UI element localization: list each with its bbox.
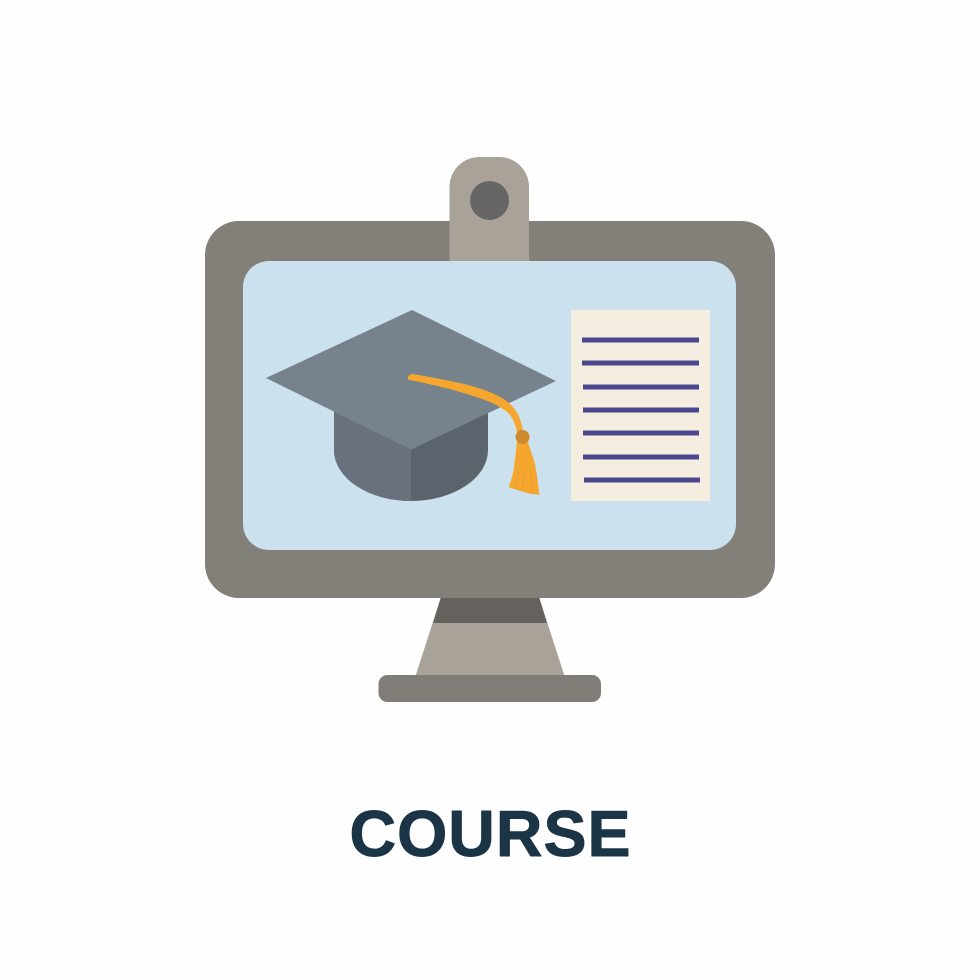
- tassel: [408, 374, 540, 495]
- webcam: [450, 157, 529, 262]
- icon: computer monitor: [205, 157, 775, 702]
- icon: graduation cap: [266, 310, 556, 501]
- title: COURSE: [350, 798, 630, 870]
- screen: [243, 261, 736, 550]
- document with lines: [571, 310, 710, 501]
- monitor stand: [378, 597, 601, 702]
- monitor frame: [205, 221, 775, 598]
